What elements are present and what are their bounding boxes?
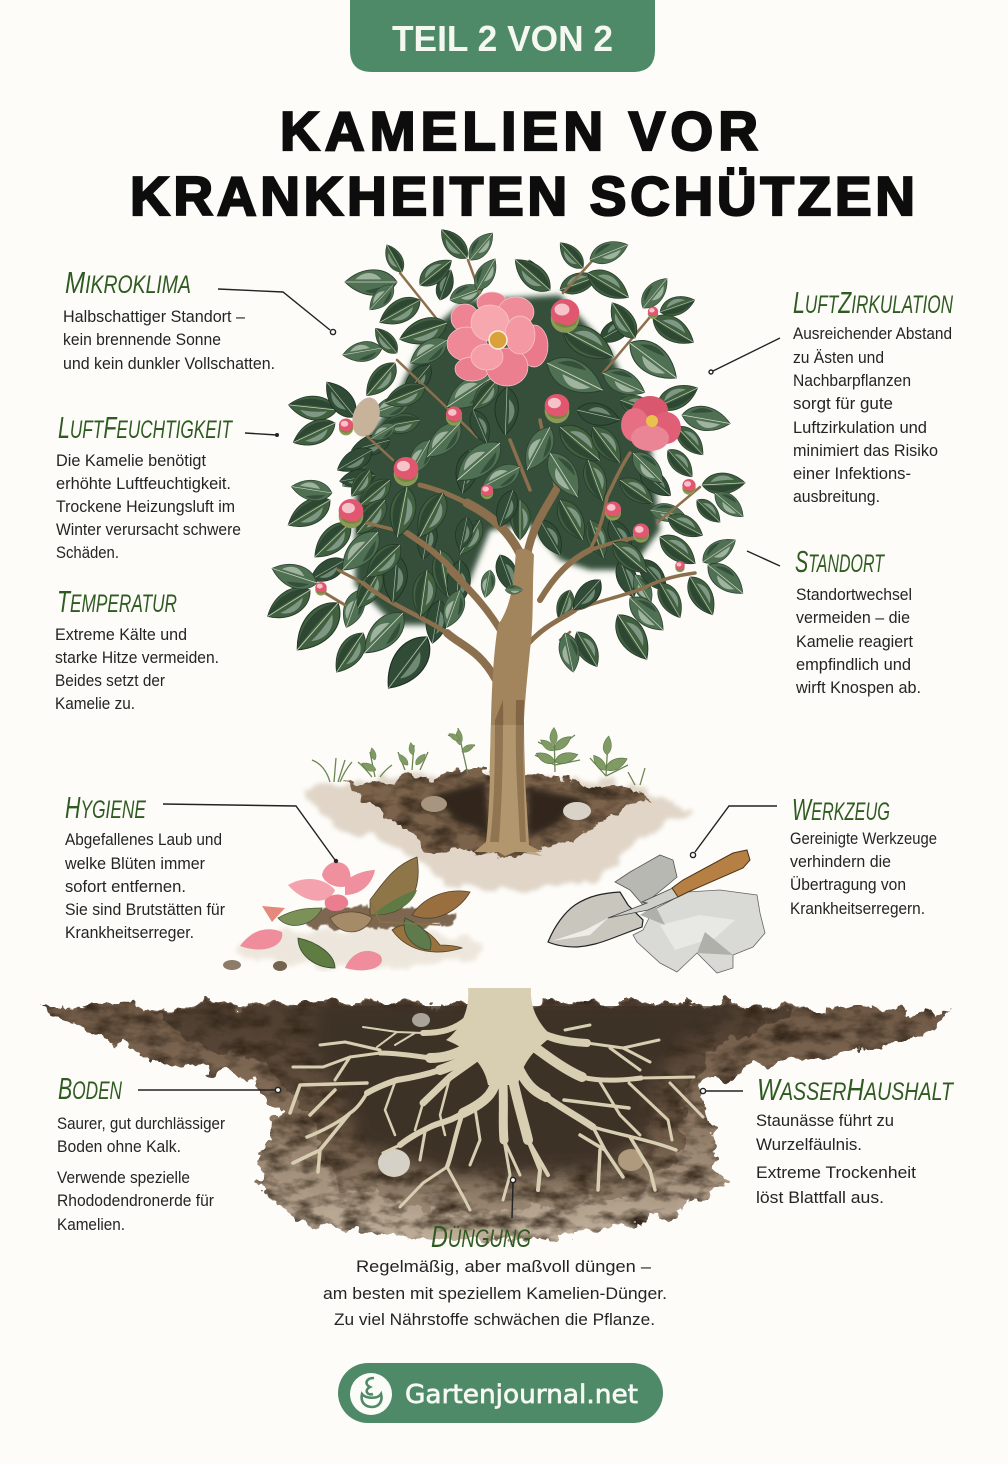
plants <box>312 728 645 785</box>
flower buds <box>315 299 696 596</box>
illustration: soil cross section <box>40 988 953 1240</box>
blade highlight <box>552 918 608 941</box>
text block: Temperatur: TEMPERATUR <box>57 584 177 619</box>
text block: Temperatur: Beides setzt der <box>55 671 165 690</box>
cloth front <box>633 890 765 973</box>
tree crown shadow mass <box>355 295 660 625</box>
icon: logo <box>350 1373 392 1415</box>
text block: Mikroklima: Halbschattiger Standort – <box>63 307 246 326</box>
cloth folds <box>660 915 735 950</box>
text block: Mikroklima: MIKROKLIMA <box>65 265 191 300</box>
callout lines and markers <box>138 289 780 1218</box>
illustration: trowel and cloth <box>548 850 765 973</box>
text block: Luftfeuchtigkeit: LUFTFEUCHTIGKEIT <box>58 410 233 445</box>
text block: Standort: Standortwechsel <box>796 585 912 604</box>
trowel neck <box>608 887 678 918</box>
text block: Luftzirkulation: minimiert das Risiko <box>793 441 938 460</box>
text block: Hygiene: welke Blüten immer <box>64 854 205 873</box>
text block: Wasserhaushalt: WASSERHAUSHALT <box>757 1072 954 1107</box>
text block: Hygiene: Abgefallenes Laub und <box>65 830 222 849</box>
text block: Standort <box>795 544 921 697</box>
text block: Wasserhaushalt <box>756 1072 954 1207</box>
trowel handle <box>672 850 750 897</box>
text block: Mikroklima <box>63 265 275 373</box>
text block: Standort: Kamelie reagiert <box>796 632 913 651</box>
footer logo pill <box>338 1363 663 1423</box>
leader: Standort <box>747 551 780 566</box>
text block: Standort: empfindlich und <box>796 655 911 674</box>
text block: Mikroklima: und kein dunkler Vollschatten. <box>63 354 275 373</box>
text block: Düngung <box>323 1219 667 1329</box>
illustration: ground mound with plants <box>305 725 695 893</box>
leader: Düngung <box>510 1177 516 1218</box>
dark hollow around trunk <box>432 782 580 838</box>
text block: Boden: Verwende spezielle <box>57 1168 190 1187</box>
mid brown soil <box>150 1005 800 1215</box>
text block: Luftfeuchtigkeit: Die Kamelie benötigt <box>56 451 206 470</box>
text block: Temperatur: starke Hitze vermeiden. <box>55 648 219 667</box>
leader: Boden <box>138 1087 281 1093</box>
text block: Wasserhaushalt: Wurzelfäulnis. <box>756 1135 862 1154</box>
leader: Wasserhaushalt <box>700 1088 743 1094</box>
leader: Mikroklima <box>218 289 336 335</box>
text block: Luftzirkulation: sorgt für gute <box>793 394 893 413</box>
text block: Standort: wirft Knospen ab. <box>795 678 921 697</box>
banner: part label <box>350 0 655 72</box>
text block: Luftzirkulation <box>793 285 954 506</box>
text block: Luftzirkulation: LUFTZIRKULATION <box>793 285 954 320</box>
text block: Boden: Kamelien. <box>57 1215 125 1234</box>
leader: Luftfeuchtigkeit <box>245 433 279 437</box>
text block: Düngung: Regelmäßig, aber maßvoll düngen – <box>356 1257 652 1276</box>
text block: Boden: Rhododendronerde für <box>57 1191 214 1210</box>
fallen leaves <box>278 857 470 968</box>
root crown <box>446 988 552 1085</box>
dark soil core <box>310 1000 740 1175</box>
text block: Hygiene: HYGIENE <box>65 790 146 825</box>
outer soil <box>40 1003 953 1240</box>
leader: Luftzirkulation <box>709 338 780 374</box>
footer logo pill: Gartenjournal.net <box>405 1380 638 1410</box>
trunk shading <box>490 700 527 846</box>
text block: Luftfeuchtigkeit: erhöhte Luftfeuchtigkeit. <box>56 474 231 493</box>
stones <box>378 1149 410 1177</box>
text block: Boden: Boden ohne Kalk. <box>57 1137 181 1156</box>
back leaves <box>306 257 687 645</box>
text block: Luftzirkulation: zu Ästen und <box>793 348 884 367</box>
pebbles <box>223 960 241 970</box>
text block: Düngung: am besten mit speziellem Kamelien-Dünger. <box>323 1284 667 1303</box>
text block: Luftfeuchtigkeit: Winter verursacht schwere <box>56 520 241 539</box>
text block: Wasserhaushalt: löst Blattfall aus. <box>756 1188 884 1207</box>
soil patch <box>235 928 485 968</box>
title: KAMELIEN VOR <box>280 100 758 162</box>
cloth back <box>615 855 677 905</box>
text block: Werkzeug: WERKZEUG <box>792 792 890 827</box>
banner: part label: TEIL 2 VON 2 <box>392 18 613 59</box>
leader: Hygiene <box>163 804 338 863</box>
stones <box>421 796 447 812</box>
soil spread <box>305 775 695 893</box>
text block: Boden <box>57 1071 225 1234</box>
text block: Düngung: DÜNGUNG <box>431 1219 531 1254</box>
title: KRANKHEITEN SCHÜTZEN <box>130 165 915 227</box>
text block: Hygiene: Sie sind Brutstätten für <box>65 900 225 919</box>
text block: Luftzirkulation: Luftzirkulation und <box>793 418 927 437</box>
branches <box>320 260 700 680</box>
text block: Luftzirkulation: einer Infektions- <box>793 464 911 483</box>
text block: Hygiene: Krankheitserreger. <box>65 923 194 942</box>
text block: Werkzeug: Krankheitserregern. <box>790 899 925 918</box>
text block: Luftzirkulation: Ausreichender Abstand <box>793 324 952 343</box>
text block: Temperatur: Extreme Kälte und <box>55 625 187 644</box>
text block: Standort: vermeiden – die <box>796 608 910 627</box>
second camellia flower <box>621 396 681 451</box>
text block: Hygiene <box>64 790 225 942</box>
title <box>130 100 915 227</box>
trowel blade <box>548 892 643 947</box>
text block: Temperatur <box>55 584 219 713</box>
text block: Luftfeuchtigkeit <box>56 410 241 562</box>
text block: Luftfeuchtigkeit: Schäden. <box>56 543 119 562</box>
front leaves <box>261 224 750 698</box>
text block: Temperatur: Kamelie zu. <box>55 694 135 713</box>
brown soil <box>345 772 650 858</box>
text block: Boden: BODEN <box>58 1071 123 1106</box>
text block: Werkzeug <box>790 792 937 918</box>
illustration: fallen leaves and petals <box>223 857 485 971</box>
text block: Werkzeug: verhindern die <box>790 852 891 871</box>
trunk <box>474 549 542 856</box>
leader: Werkzeug <box>690 806 777 858</box>
text block: Mikroklima: kein brennende Sonne <box>63 330 221 349</box>
text block: Luftzirkulation: ausbreitung. <box>793 487 880 506</box>
text block: Luftfeuchtigkeit: Trockene Heizungsluft im <box>56 497 235 516</box>
pink flower on pile <box>288 862 375 911</box>
text block: Hygiene: sofort entfernen. <box>65 877 186 896</box>
main camellia flower <box>447 292 548 386</box>
main roots <box>290 1018 703 1210</box>
text block: Werkzeug: Gereinigte Werkzeuge <box>790 829 937 848</box>
text block: Standort: STANDORT <box>795 544 885 579</box>
brown dried leaf <box>347 394 385 440</box>
text block: Düngung: Zu viel Nährstoffe schwächen die Pflanze. <box>334 1310 655 1329</box>
text block: Werkzeug: Übertragung von <box>790 875 906 894</box>
loose petals <box>240 929 282 949</box>
text block: Boden: Saurer, gut durchlässiger <box>57 1114 225 1133</box>
trunk base over soil <box>474 725 542 856</box>
illustration: camellia tree <box>261 224 750 856</box>
text block: Luftzirkulation: Nachbarpflanzen <box>793 371 911 390</box>
text block: Wasserhaushalt: Extreme Trockenheit <box>756 1163 916 1182</box>
text block: Wasserhaushalt: Staunässe führt zu <box>756 1111 894 1130</box>
